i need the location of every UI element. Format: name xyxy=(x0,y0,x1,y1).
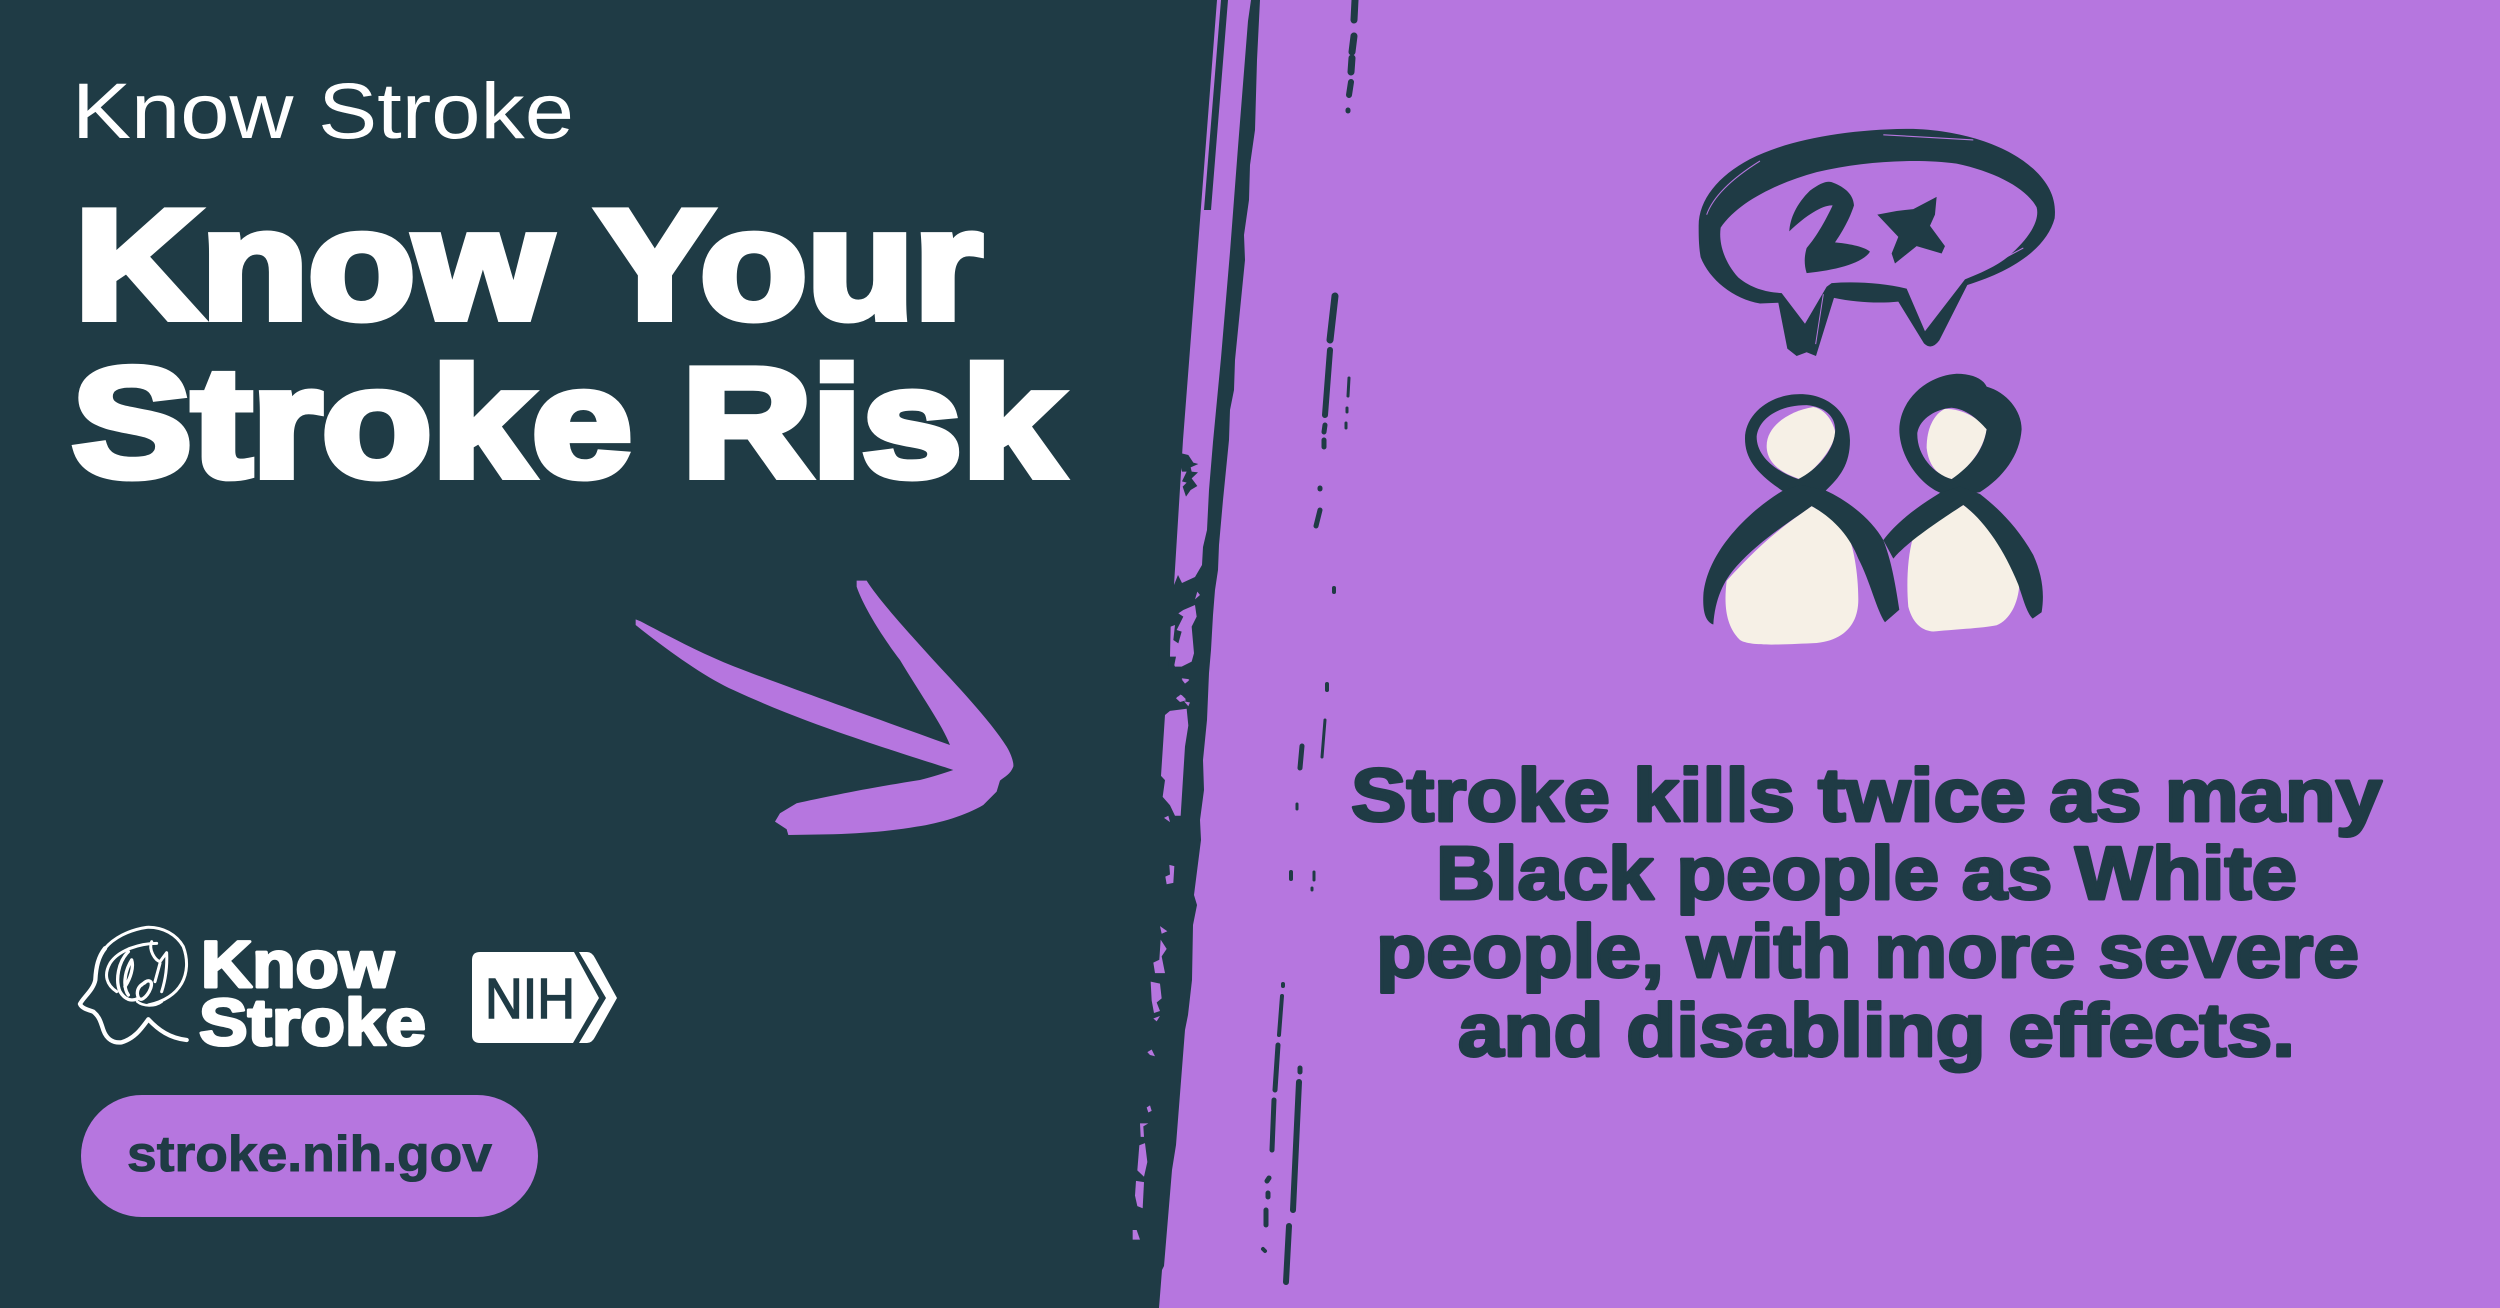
lower brush patches xyxy=(1170,592,1200,700)
person left xyxy=(1703,394,1899,645)
text block: stroke statistic xyxy=(1351,753,2382,1072)
logo: NIH: NIH xyxy=(485,967,575,1031)
text block: stroke statistic: Black people as White xyxy=(1436,831,2297,915)
text block: stroke statistic: Stroke kills twice as many xyxy=(1351,753,2382,837)
digit 2 xyxy=(1789,182,1870,273)
logo: Know Stroke head icon xyxy=(80,927,187,1042)
brush strip beside the edge xyxy=(1174,0,1251,585)
dark brush specks on purple xyxy=(1263,0,1355,1282)
eyebrow: Know Stroke: Know Stroke xyxy=(72,66,574,155)
panel: purple right background with brushed edge xyxy=(1133,0,2500,1308)
title: Know Your Stroke Risk xyxy=(72,178,1063,509)
multiplication x xyxy=(1877,197,1945,263)
icon: speech bubble with 2x above two people xyxy=(1699,129,2055,645)
person right xyxy=(1883,374,2043,632)
brush streaks on bubble xyxy=(1707,135,2023,344)
button: stroke.nih.gov xyxy=(81,1095,538,1217)
text block: stroke statistic: people, with more severe xyxy=(1376,909,2359,993)
logo: Know Stroke wordmark: Know xyxy=(201,927,395,1001)
button: stroke.nih.gov: stroke.nih.gov xyxy=(127,1126,492,1182)
text block: stroke statistic: and disabling effects. xyxy=(1458,988,2295,1072)
logo: Know Stroke wordmark xyxy=(199,927,426,1059)
speech bubble xyxy=(1699,129,2055,356)
dark brush blotch on strip xyxy=(1168,453,1198,670)
arrow: purple brush arrow xyxy=(636,581,1013,835)
logo: Know Stroke wordmark: Stroke xyxy=(199,985,426,1059)
title: Know Your Stroke Risk: Stroke Risk xyxy=(72,336,1063,509)
title: Know Your Stroke Risk: Know Your xyxy=(75,178,982,351)
logo: NIH xyxy=(472,952,617,1043)
